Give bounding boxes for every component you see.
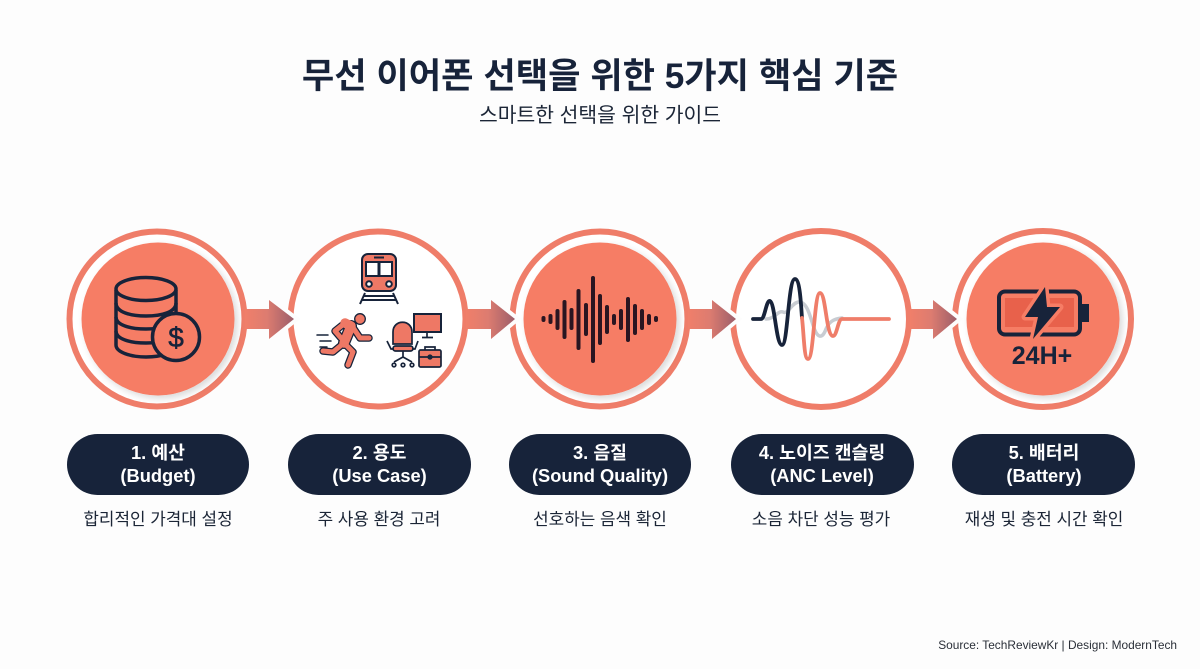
icon: battery with bolt: 24H+ <box>1012 342 1072 370</box>
icon: battery with bolt <box>999 287 1089 370</box>
icon: noise cancelling wave <box>753 279 889 359</box>
icon: office chair, monitor and briefcase <box>387 314 441 367</box>
pill label 4 <box>731 434 914 495</box>
arrow 2 <box>466 300 515 339</box>
icon: coin stack with dollar: $ <box>168 322 184 353</box>
subtitle: 스마트한 선택을 위한 가이드 <box>479 104 721 127</box>
pill label 4: (ANC Level) <box>770 465 874 486</box>
pill label 5 <box>952 434 1135 495</box>
pill label 3: 3. 음질 <box>573 442 627 463</box>
step 5 circle: battery <box>955 231 1131 407</box>
step 4 circle: ANC level <box>733 231 909 407</box>
step 1 circle: budget <box>70 232 244 406</box>
pill label 5: 5. 배터리 <box>1009 442 1079 463</box>
pill label 2: (Use Case) <box>332 465 427 486</box>
arrow 3 <box>688 300 736 339</box>
title: 무선 이어폰 선택을 위한 5가지 핵심 기준 <box>302 57 898 96</box>
pill label 1: 1. 예산 <box>131 442 185 463</box>
icon: coin stack with dollar <box>116 278 200 360</box>
pill label 5: (Battery) <box>1006 465 1082 486</box>
description 4: 소음 차단 성능 평가 <box>752 510 891 529</box>
arrow 4 <box>910 300 957 339</box>
icon: runner <box>317 314 369 365</box>
pill label 1: (Budget) <box>120 465 196 486</box>
pill label 3: (Sound Quality) <box>532 465 668 486</box>
step 2 circle: use case <box>290 232 466 406</box>
description 3: 선호하는 음색 확인 <box>533 510 667 529</box>
pill label 2 <box>288 434 471 495</box>
step 3 circle: sound quality <box>512 232 688 406</box>
arrow 1 <box>245 300 294 339</box>
pill label 1 <box>67 434 249 495</box>
pill label 3 <box>509 434 691 495</box>
description 5: 재생 및 충전 시간 확인 <box>965 510 1123 529</box>
description 1: 합리적인 가격대 설정 <box>83 510 233 529</box>
description 2: 주 사용 환경 고려 <box>318 510 440 529</box>
icon: train <box>360 254 398 304</box>
source footer: Source: TechReviewKr | Design: ModernTech <box>938 638 1177 652</box>
icon: sound waveform <box>544 278 656 361</box>
pill label 2: 2. 용도 <box>353 442 407 463</box>
pill label 4: 4. 노이즈 캔슬링 <box>759 442 885 463</box>
